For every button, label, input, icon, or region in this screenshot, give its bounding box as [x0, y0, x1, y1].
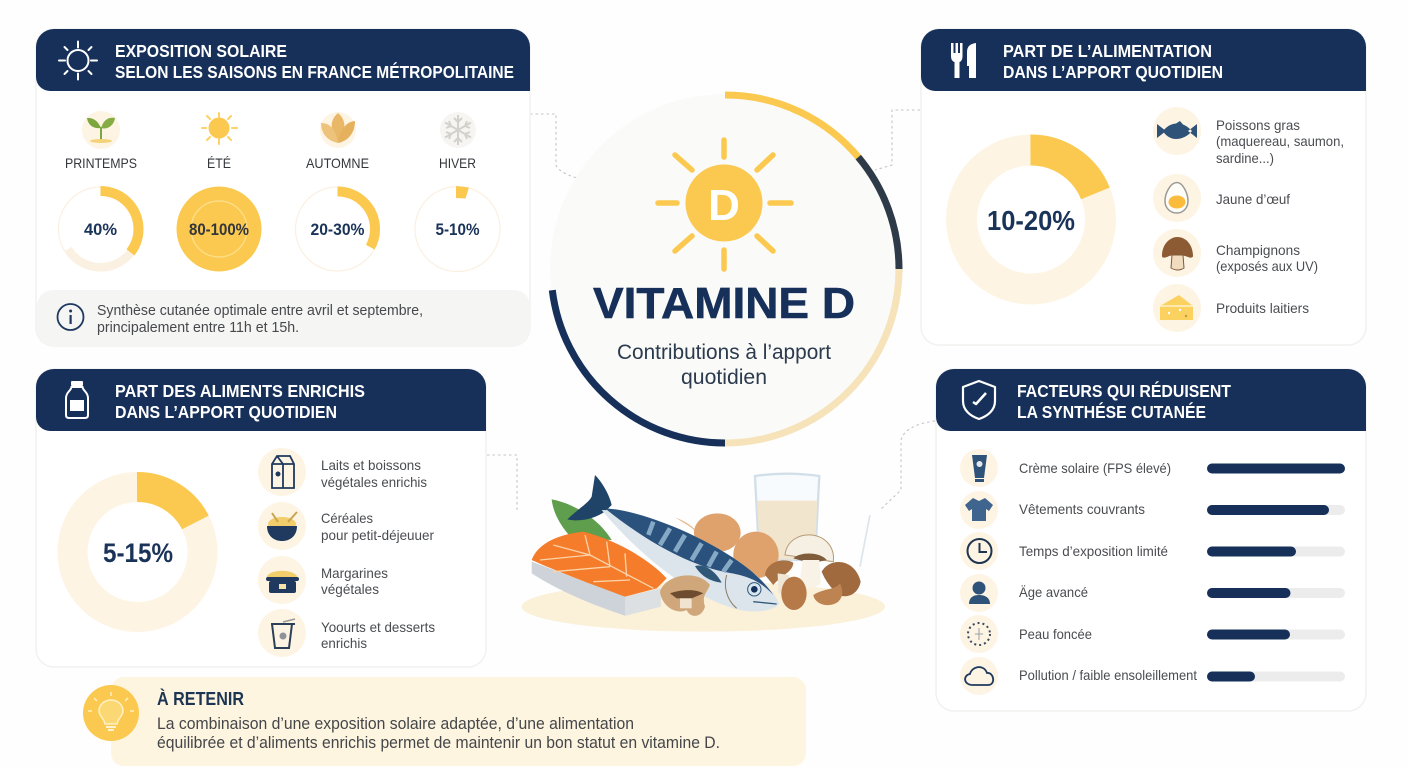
factor: crème solaire — [960, 449, 1345, 487]
title: VITAMINE D — [593, 279, 855, 328]
icon: person — [960, 574, 998, 612]
salmon steak — [532, 532, 667, 616]
header: exposition solaire — [36, 29, 530, 91]
item: laits: Laits et boissons — [321, 457, 421, 473]
item: produits laitiers: Produits laitiers — [1216, 300, 1309, 316]
donut: 5-15%: 5-15% — [103, 538, 173, 568]
factor: vêtements: Vêtements couvrants — [1019, 501, 1145, 517]
item: poissons gras — [1153, 107, 1344, 166]
item: céréales: pour petit-déjeuuer — [321, 527, 434, 543]
donut: 5-10%: 5-10% — [436, 220, 480, 239]
icon: sprout — [82, 111, 120, 149]
item: laits — [258, 448, 427, 496]
heading: EXPOSITION SOLAIRE — [115, 41, 287, 61]
icon: sun D — [658, 140, 791, 269]
donut: 10-20% — [962, 150, 1100, 289]
factor: âge: Äge avancé — [1019, 584, 1088, 600]
icon: clock — [960, 532, 998, 570]
progress ring — [551, 95, 899, 443]
callout text — [157, 715, 720, 752]
heading: LA SYNTHÉSE CUTANÉE — [1017, 401, 1206, 422]
season: été: ÉTÉ — [207, 155, 231, 171]
panel: part de l'alimentation — [921, 29, 1366, 345]
heading: FACTEURS QUI RÉDUISENT — [1017, 380, 1231, 401]
season: hiver: HIVER — [439, 155, 476, 171]
item: champignons: (exposés aux UV) — [1216, 258, 1318, 274]
heading — [1003, 41, 1223, 82]
donut: 40%: 40% — [84, 220, 117, 239]
item: laits: végétales enrichis — [321, 474, 427, 490]
donut: 40% — [58, 187, 142, 271]
donut: 80-100% — [176, 186, 262, 272]
callout: à retenir — [83, 677, 806, 766]
factor: crème solaire: Crème solaire (FPS élevé) — [1019, 460, 1171, 476]
item: céréales — [258, 502, 434, 550]
item: jaune d'œuf: Jaune d’œuf — [1216, 191, 1290, 207]
icon: mushroom — [1153, 229, 1201, 277]
header: aliments enrichis — [36, 369, 486, 431]
factor: pollution: Pollution / faible ensoleillement — [1019, 667, 1197, 683]
heading: SELON LES SAISONS EN FRANCE MÉTROPOLITAINE — [115, 61, 514, 82]
icon: sun — [202, 113, 237, 144]
central badge: vitamine D — [550, 94, 900, 444]
icon: cheese — [1153, 284, 1201, 332]
icon: sun outline — [59, 42, 97, 80]
icon: dotted circle — [960, 615, 998, 653]
item: produits laitiers — [1153, 284, 1309, 332]
season: automne: AUTOMNE — [306, 155, 369, 171]
season: printemps — [58, 111, 142, 271]
season: automne — [296, 112, 380, 271]
item: céréales: Céréales — [321, 510, 373, 526]
leaf — [552, 499, 612, 540]
donut: 20-30% — [296, 187, 380, 271]
season: printemps: PRINTEMPS — [65, 155, 137, 171]
icon: snowflake — [440, 112, 476, 148]
factor: vêtements — [960, 491, 1345, 529]
factor: temps: Temps d’exposition limité — [1019, 543, 1168, 559]
item: margarines — [258, 556, 388, 604]
icon: yogurt cup — [258, 609, 306, 657]
subtitle: quotidien — [681, 366, 767, 389]
factor: peau: Peau foncée — [1019, 626, 1092, 642]
icon: info — [58, 304, 84, 330]
icon: bottle — [66, 381, 88, 418]
item: yaourts — [258, 609, 435, 657]
icon: milk carton — [258, 448, 306, 496]
item: jaune d'œuf — [1153, 174, 1290, 222]
info note: principalement entre 11h et 15h. — [97, 319, 299, 336]
item: champignons — [1153, 229, 1318, 277]
icon: fish — [1153, 107, 1201, 155]
heading — [1017, 380, 1231, 422]
item: yaourts: enrichis — [321, 635, 367, 651]
panel: part des aliments enrichis — [36, 369, 486, 667]
callout text: équilibrée et d’aliments enrichis permet de maintenir un bon statut en vitamine D. — [157, 734, 720, 752]
icon: light bulb — [83, 685, 139, 741]
donut: 5-15% — [72, 487, 202, 617]
factor: âge — [960, 574, 1345, 612]
item: yaourts: Yoourts et desserts — [321, 619, 435, 635]
subtitle: Contributions à l’apport — [617, 341, 831, 364]
heading: PART DE L’ALIMENTATION — [1003, 41, 1212, 61]
item: margarines: végétales — [321, 581, 379, 597]
info note: Synthèse cutanée optimale entre avril et septembre, — [97, 302, 423, 319]
panel: exposition solaire — [36, 29, 530, 346]
heading: DANS L’APPORT QUOTIDIEN — [115, 402, 337, 422]
heading — [115, 41, 514, 82]
heading — [115, 381, 365, 422]
item: poissons gras: (maquereau, saumon, — [1216, 133, 1344, 149]
item: champignons: Champignons — [1216, 242, 1300, 258]
icon: sunscreen tube — [960, 449, 998, 487]
icon: sun D: D — [708, 181, 740, 230]
mushrooms — [660, 535, 861, 616]
callout text: La combinaison d’une exposition solaire adaptée, d’une alimentation — [157, 715, 634, 733]
heading: DANS L’APPORT QUOTIDIEN — [1003, 62, 1223, 82]
icon: cereal bowl — [258, 502, 306, 550]
donut: 5-10% — [415, 186, 500, 272]
mackerel — [567, 475, 779, 611]
panel: facteurs réduisant la synthèse — [936, 369, 1366, 711]
glass of milk — [755, 474, 870, 567]
info note — [37, 290, 530, 346]
donut: 10-20%: 10-20% — [987, 205, 1075, 236]
item: margarines: Margarines — [321, 565, 388, 581]
icon: shield check — [963, 381, 995, 419]
icon: t-shirt — [960, 491, 998, 529]
factor: pollution — [960, 657, 1345, 695]
icon: fork and knife — [951, 43, 976, 78]
icon: cloud — [960, 657, 998, 695]
callout heading: À RETENIR — [157, 688, 244, 709]
eggs — [675, 513, 779, 578]
subtitle — [617, 341, 831, 389]
donut: 80-100%: 80-100% — [189, 220, 249, 239]
factor: temps — [960, 532, 1345, 570]
item: poissons gras: Poissons gras — [1216, 117, 1300, 133]
season: hiver — [415, 112, 500, 272]
header: alimentation — [921, 29, 1366, 91]
heading: PART DES ALIMENTS ENRICHIS — [115, 381, 365, 401]
factor: peau — [960, 615, 1345, 653]
icon: egg — [1153, 174, 1201, 222]
item: poissons gras: sardine...) — [1216, 150, 1274, 166]
donut: 20-30%: 20-30% — [310, 220, 364, 239]
icon: margarine tub — [258, 556, 306, 604]
header: facteurs — [936, 369, 1366, 431]
season: été — [176, 113, 262, 272]
food illustration — [522, 474, 885, 632]
icon: leaves — [320, 112, 356, 148]
